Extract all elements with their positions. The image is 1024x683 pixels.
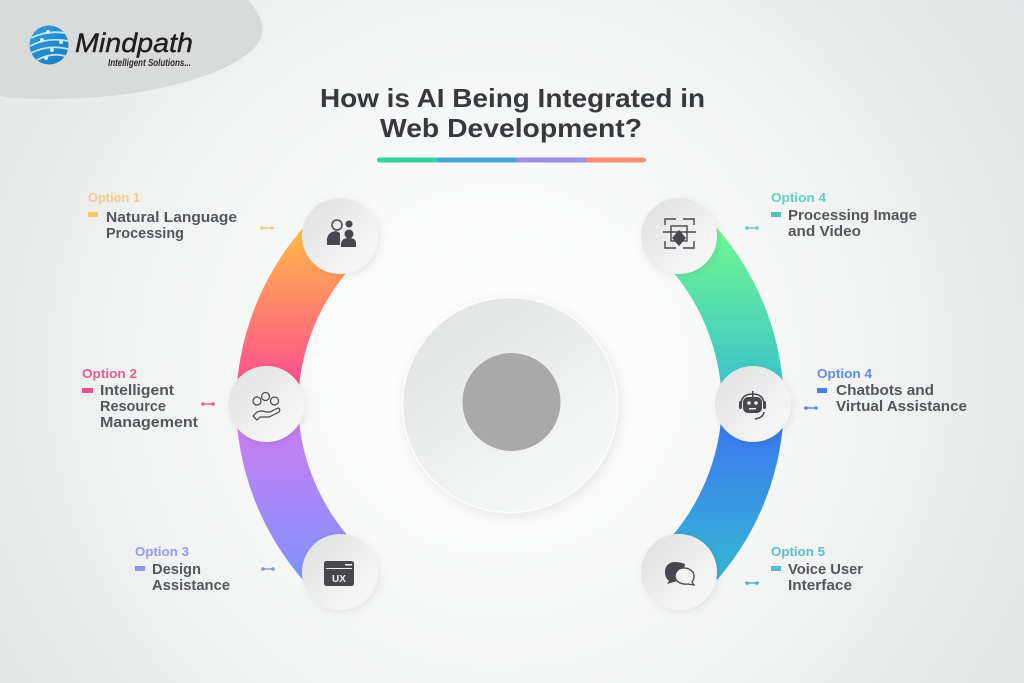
connector: option 1 <box>260 226 274 230</box>
label: option 5: Voice User <box>788 561 863 578</box>
connector: option 4 image <box>745 226 759 230</box>
logo wordmark: Mindpath <box>75 28 193 58</box>
label: option 3: Assistance <box>152 577 230 594</box>
icon: hand with coins <box>253 392 280 420</box>
title: How is AI Being Integrated in <box>320 83 705 113</box>
icon: UX window: UX <box>332 574 346 585</box>
node: people icon <box>302 198 378 274</box>
label: option 5: Option 5 <box>771 544 825 559</box>
label: option 5: Interface <box>788 577 852 594</box>
arc: orange to pink <box>236 228 347 405</box>
title: Web Development? <box>380 113 642 143</box>
connector: option 2 <box>201 402 215 406</box>
arc: blue <box>673 405 784 580</box>
title underline <box>377 158 646 162</box>
label: option 4 image: Processing Image <box>788 207 917 224</box>
arc: purple <box>236 405 347 580</box>
label: option 3: Option 3 <box>135 544 189 559</box>
node: resource icon <box>228 366 304 442</box>
icon: robot head <box>739 391 766 419</box>
label: option 1 <box>88 190 237 242</box>
label: option 1: Processing <box>106 225 184 242</box>
label: option 4 image <box>771 190 917 240</box>
node: UX icon <box>302 534 378 610</box>
central circle <box>402 298 618 512</box>
label: option 3 <box>135 544 230 594</box>
label: option 4 chatbots: Chatbots and <box>836 382 934 399</box>
label: option 2: Option 2 <box>82 366 137 381</box>
label: option 1: Option 1 <box>88 190 140 205</box>
label: option 4 image: Option 4 <box>771 190 827 205</box>
connector: option 3 <box>261 567 275 571</box>
icon: globe <box>30 26 68 64</box>
connector: option 4 chatbots <box>804 406 818 410</box>
label: option 1: Natural Language <box>106 209 237 226</box>
arc: green to teal <box>673 228 784 405</box>
icon: image scan <box>663 219 696 248</box>
label: option 4 chatbots: Option 4 <box>817 366 873 381</box>
node: chat icon <box>641 534 717 610</box>
icon: people <box>327 220 356 247</box>
logo tagline: Intelligent Solutions... <box>108 57 191 69</box>
node: image processing icon <box>641 198 717 274</box>
central grey disc <box>462 353 560 451</box>
label: option 2 <box>82 366 198 431</box>
connector: option 5 <box>745 581 759 585</box>
logo backdrop shape <box>0 0 262 99</box>
label: option 4 image: and Video <box>788 223 861 240</box>
label: option 2: Resource <box>100 398 166 415</box>
logo <box>30 26 193 69</box>
icon: speech bubbles <box>665 562 694 585</box>
label: option 2: Management <box>100 414 198 431</box>
title <box>320 83 705 143</box>
label: option 5 <box>771 544 863 594</box>
label: option 4 chatbots <box>817 366 967 415</box>
label: option 4 chatbots: Virtual Assistance <box>836 398 967 415</box>
label: option 2: Intelligent <box>100 382 174 399</box>
label: option 3: Design <box>152 561 201 578</box>
node: chatbot icon <box>715 366 791 442</box>
